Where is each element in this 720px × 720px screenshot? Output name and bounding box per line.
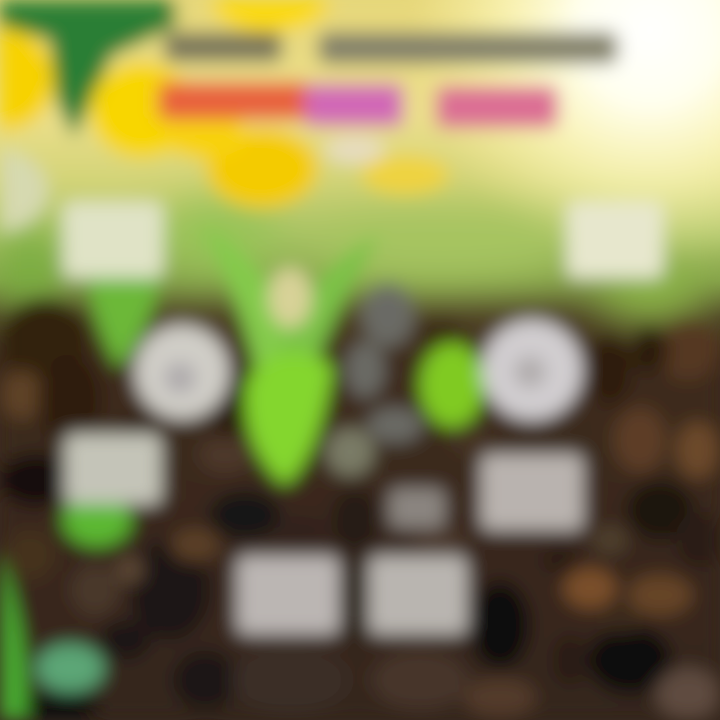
soil texture xyxy=(0,298,720,720)
plant: lower left sprout xyxy=(63,494,131,546)
plant: lower left pale leaf xyxy=(36,644,104,692)
card: middle left xyxy=(65,434,161,504)
card: top right xyxy=(567,202,663,278)
water drops: grey centre group xyxy=(326,283,423,476)
leaf: side left xyxy=(200,225,310,400)
flower: lower yellow xyxy=(206,128,318,208)
card: bottom right xyxy=(369,556,467,634)
plant: right sprout xyxy=(420,343,484,427)
title block xyxy=(158,32,618,164)
title line 1 xyxy=(164,32,618,64)
icon badge: left circle xyxy=(135,325,229,419)
bud: pale top xyxy=(268,268,312,328)
plant: far left pale leaf xyxy=(0,150,48,232)
flower: left yellow xyxy=(0,26,54,132)
flower: top yellow xyxy=(208,0,332,32)
icon badge: right circle xyxy=(482,320,582,420)
glow: pale yellow xyxy=(361,155,449,195)
leaf: dark green top corner xyxy=(0,0,176,138)
stem: main xyxy=(245,352,333,485)
card: top left xyxy=(63,202,163,278)
flower: bridge yellow xyxy=(163,111,247,159)
plant: central seedling xyxy=(200,225,380,485)
card: small centre xyxy=(389,488,445,528)
yellow flowers and green leaves, top left xyxy=(0,0,449,208)
sun glow xyxy=(428,0,720,256)
plant: left sprout xyxy=(88,272,162,368)
foliage band xyxy=(0,200,705,321)
card: bottom left xyxy=(237,556,339,634)
plant: edge sprout xyxy=(0,555,27,720)
glow: under title xyxy=(325,136,385,164)
flower: centre yellow xyxy=(90,62,194,158)
card: right xyxy=(481,454,583,530)
title line 2 xyxy=(158,82,558,128)
leaf: side right xyxy=(265,235,380,400)
